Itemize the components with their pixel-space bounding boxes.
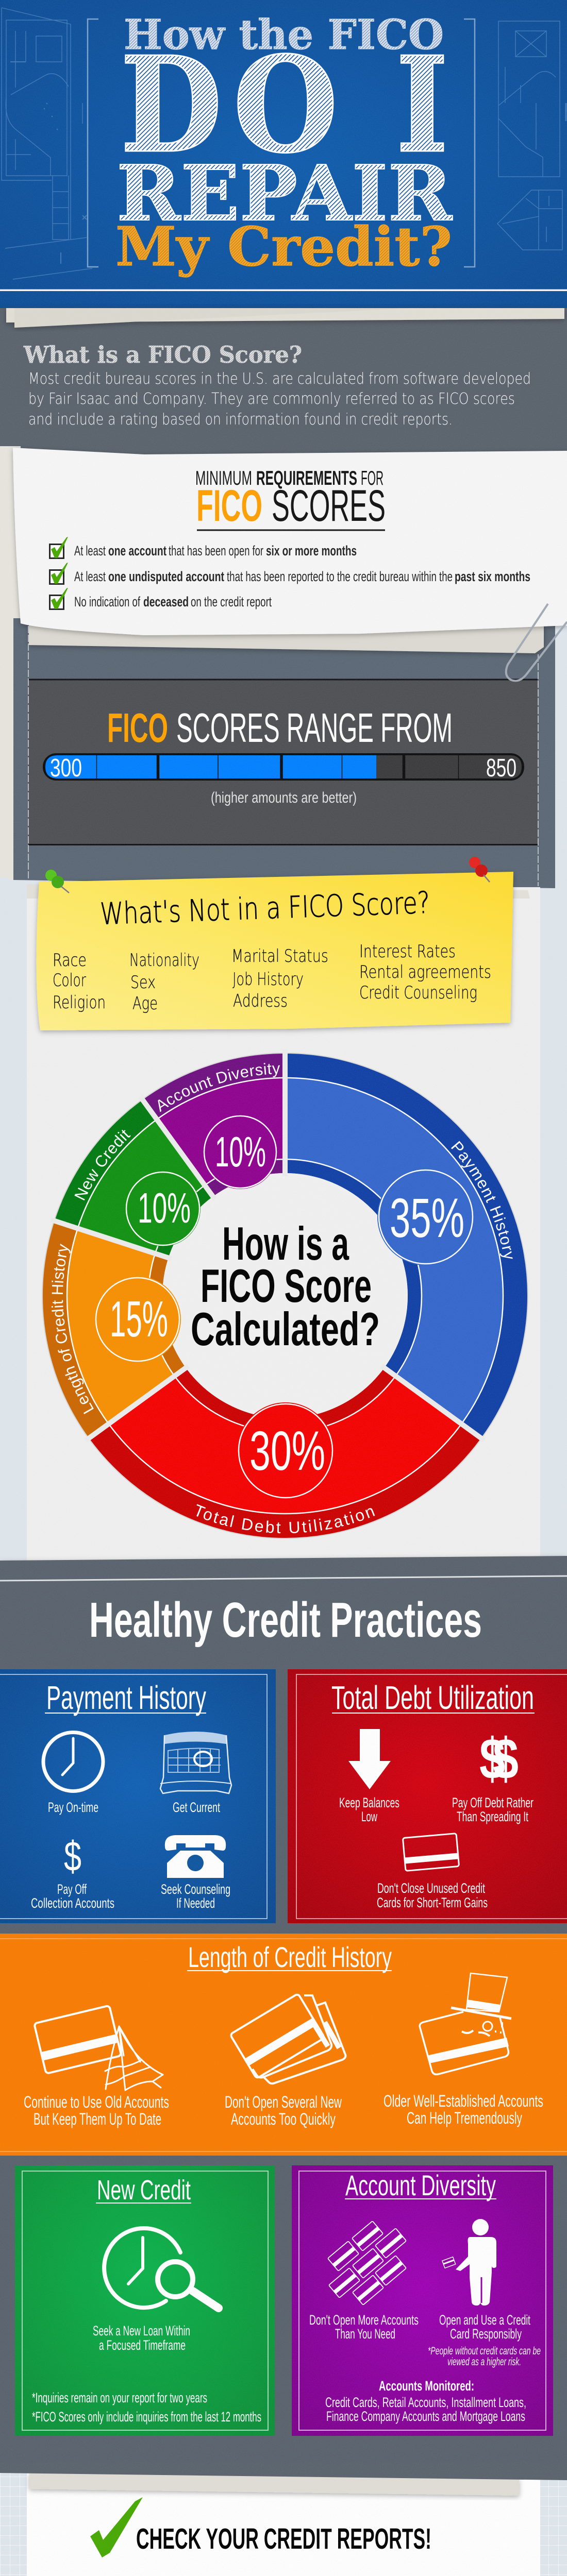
card: payment history: Pay Off (57, 1882, 87, 1897)
exclusions list: Credit Counseling (359, 982, 477, 1003)
exclusions list: Race (53, 950, 87, 971)
label: total debt utilization: Total Debt Utilization (196, 1504, 375, 1533)
card: payment history: Get Current (173, 1800, 220, 1815)
beige paper layer (29, 618, 544, 653)
checklist item 1: At least (74, 543, 106, 558)
card: new credit: *Inquiries remain on your report for two years (32, 2390, 207, 2405)
heading: minimum requirements: MINIMUM (195, 467, 252, 489)
panel: blueprint header (0, 0, 567, 308)
heading: FICO scores: SCORES (272, 481, 386, 531)
checklist item 2: that has been reported to the credit bureau within the (227, 569, 453, 584)
exclusions list (53, 941, 491, 1014)
title brackets (88, 19, 475, 267)
card: total debt utilization: Don't Close Unused Credit (377, 1880, 485, 1896)
card: new credit: a Focused Timeframe (99, 2337, 186, 2353)
checklist item 2 (49, 563, 530, 584)
checklist item 3: No indication of (74, 594, 140, 609)
icon: double dollar signs: $ (493, 1726, 519, 1791)
badge: 15%: 15% (110, 1291, 168, 1347)
segment: account diversity (103, 1113, 468, 1478)
heading: scores range from: FICO (107, 705, 168, 751)
card: total debt utilization: Keep Balances (339, 1795, 399, 1810)
body text (28, 370, 531, 429)
badge: new credit 10%: 10% (138, 1184, 191, 1232)
badge: 30% (237, 1402, 334, 1499)
exclusions list: Age (132, 993, 158, 1014)
range bar: 300 (50, 754, 82, 782)
icon: clock (43, 1732, 103, 1791)
card: total debt utilization: Low (361, 1809, 377, 1824)
icon: green pin (45, 870, 69, 893)
heading: minimum requirements: FOR (361, 467, 383, 489)
label: payment history: Payment History (451, 1141, 513, 1259)
checklist item 1: six or more months (266, 543, 357, 558)
card: account diversity: Account Diversity (345, 2169, 496, 2201)
card: payment history: Collection Accounts (31, 1895, 114, 1911)
exclusions list: Job History (232, 969, 304, 990)
donut centre title: FICO Score (201, 1260, 372, 1312)
card: total debt utilization (288, 1669, 567, 1923)
panel: FICO score range (28, 626, 538, 886)
icon: stacked credit cards (230, 1993, 345, 2083)
title: D (120, 28, 222, 182)
label: account diversity: Account Diversity (158, 1063, 280, 1112)
card: length of credit history (0, 1934, 567, 2156)
checklist item 3: deceased (143, 594, 189, 609)
exclusions list: Nationality (129, 950, 199, 971)
panel: what is a FICO score (0, 304, 567, 457)
body text: and include a rating based on information found in credit reports. (28, 411, 453, 429)
icon: telephone (165, 1835, 226, 1878)
label: length of credit history: Length of Credit History (52, 1244, 94, 1414)
card: length of credit history: But Keep Them Up To Date (34, 2110, 161, 2128)
exclusions list: Interest Rates (359, 941, 456, 962)
checklist item 1: one account (108, 543, 166, 558)
segment: payment history (103, 1113, 468, 1478)
exclusions list: Rental agreements (359, 962, 491, 982)
card: length of credit history: Length of Credit History (188, 1941, 392, 1973)
icon: card with top hat and monocle (420, 1973, 511, 2074)
exclusions list: Marital Status (231, 946, 328, 967)
panel: FICO score donut chart (42, 1053, 528, 1539)
checklist item 3 (49, 588, 272, 609)
card: payment history (0, 1669, 276, 1923)
white paper (13, 448, 567, 635)
side paper and slate backing (0, 446, 567, 1566)
blueprint drawing: right plans (497, 21, 566, 250)
card: account diversity: viewed as a higher risk. (447, 2356, 521, 2368)
exclusions list: Address (233, 991, 288, 1011)
card: payment history: Payment History (46, 1679, 206, 1716)
badge: account diversity 10% (203, 1115, 277, 1189)
blueprint drawing: left plan (2, 8, 92, 279)
icon: double dollar signs: $ (479, 1726, 505, 1791)
donut centre title: Calculated? (191, 1303, 380, 1355)
checklist item 2: past six months (455, 569, 530, 584)
card: length of credit history: Continue to Use Old Accounts (24, 2093, 169, 2111)
badge: 35% (377, 1168, 474, 1265)
checklist item 1 (49, 537, 357, 558)
range bar: 850 (486, 754, 516, 782)
icon: down arrow (348, 1729, 391, 1789)
card: new credit: Seek a New Loan Within (93, 2323, 190, 2338)
panel: healthy credit practices (0, 1556, 567, 2480)
exclusions list: Color (53, 970, 86, 991)
card: new credit (15, 2165, 275, 2436)
label: new credit: New Credit (74, 1129, 131, 1200)
checklist item 2: one undisputed account (108, 569, 224, 584)
card: payment history: Pay On-time (48, 1800, 98, 1815)
range bar (43, 753, 524, 782)
card: account diversity: Accounts Monitored: (379, 2378, 474, 2394)
badge: 15% (94, 1276, 181, 1363)
title: O (233, 28, 338, 182)
badge: 35%: 35% (390, 1187, 464, 1249)
heading: minimum requirements (195, 467, 383, 489)
title: REPAIR (116, 148, 453, 238)
card: total debt utilization: Cards for Short-Term Gains (377, 1895, 488, 1910)
title: How the FICO (124, 10, 444, 59)
icon: red pin (469, 857, 490, 882)
title: My Credit? (115, 215, 452, 278)
donut centre title (191, 1218, 380, 1355)
sticky title: What's Not in a FICO Score? (99, 885, 430, 931)
segment: total debt utilization (103, 1113, 468, 1478)
badge: account diversity 10%: 10% (215, 1128, 266, 1176)
icon: paperclip (506, 604, 567, 681)
heading: scores range from (107, 705, 453, 751)
icon: credit card (403, 1834, 459, 1871)
icon: person holding card (442, 2219, 496, 2306)
checklist item 1: that has been open for (169, 543, 263, 558)
icon: many credit cards (328, 2221, 406, 2305)
panel: minimum requirements (13, 448, 567, 653)
card: total debt utilization: Than Spreading It (457, 1809, 528, 1824)
exclusions list: Sex (130, 972, 156, 993)
title (115, 10, 453, 278)
card: account diversity: Don't Open More Accounts (309, 2312, 419, 2328)
panel: check your credit reports (0, 2463, 567, 2576)
heading: FICO scores: FICO (196, 481, 262, 531)
checklist item 2: At least (74, 569, 106, 584)
title: I (396, 28, 448, 182)
icon: big check mark (90, 2497, 143, 2557)
range note: (higher amounts are better) (211, 789, 357, 806)
heading: What is a FICO Score? (23, 341, 302, 368)
icon: card with cobweb (34, 2006, 163, 2090)
card: new credit: *FICO Scores only include inquiries from the last 12 months (32, 2409, 261, 2425)
donut centre title: How is a (222, 1218, 349, 1270)
icon: calendar (160, 1732, 231, 1793)
heading: FICO scores (196, 481, 386, 531)
badge: new credit 10% (125, 1171, 201, 1246)
panel: what's not in a FICO score sticky note (36, 857, 513, 1030)
card: account diversity (292, 2165, 553, 2436)
badge: 30%: 30% (249, 1419, 325, 1482)
card: account diversity: Than You Need (335, 2326, 395, 2342)
card: length of credit history: Don't Open Several New (225, 2093, 342, 2111)
card: account diversity: Card Responsibly (450, 2326, 522, 2342)
paper strips under header (6, 308, 564, 328)
icon: dollar sign: $ (64, 1833, 81, 1880)
segment: length of credit history (103, 1113, 468, 1478)
heading: minimum requirements: REQUIREMENTS (256, 467, 357, 489)
exclusions list: Religion (53, 992, 106, 1013)
card: payment history: Seek Counseling (161, 1882, 230, 1897)
icon: clock with magnifier (104, 2228, 219, 2308)
card: length of credit history: Accounts Too Quickly (231, 2110, 336, 2128)
card: new credit: New Credit (97, 2175, 191, 2206)
checklist item 3: on the credit report (191, 594, 272, 609)
card: payment history: If Needed (176, 1895, 215, 1911)
segment: new credit (103, 1113, 468, 1478)
